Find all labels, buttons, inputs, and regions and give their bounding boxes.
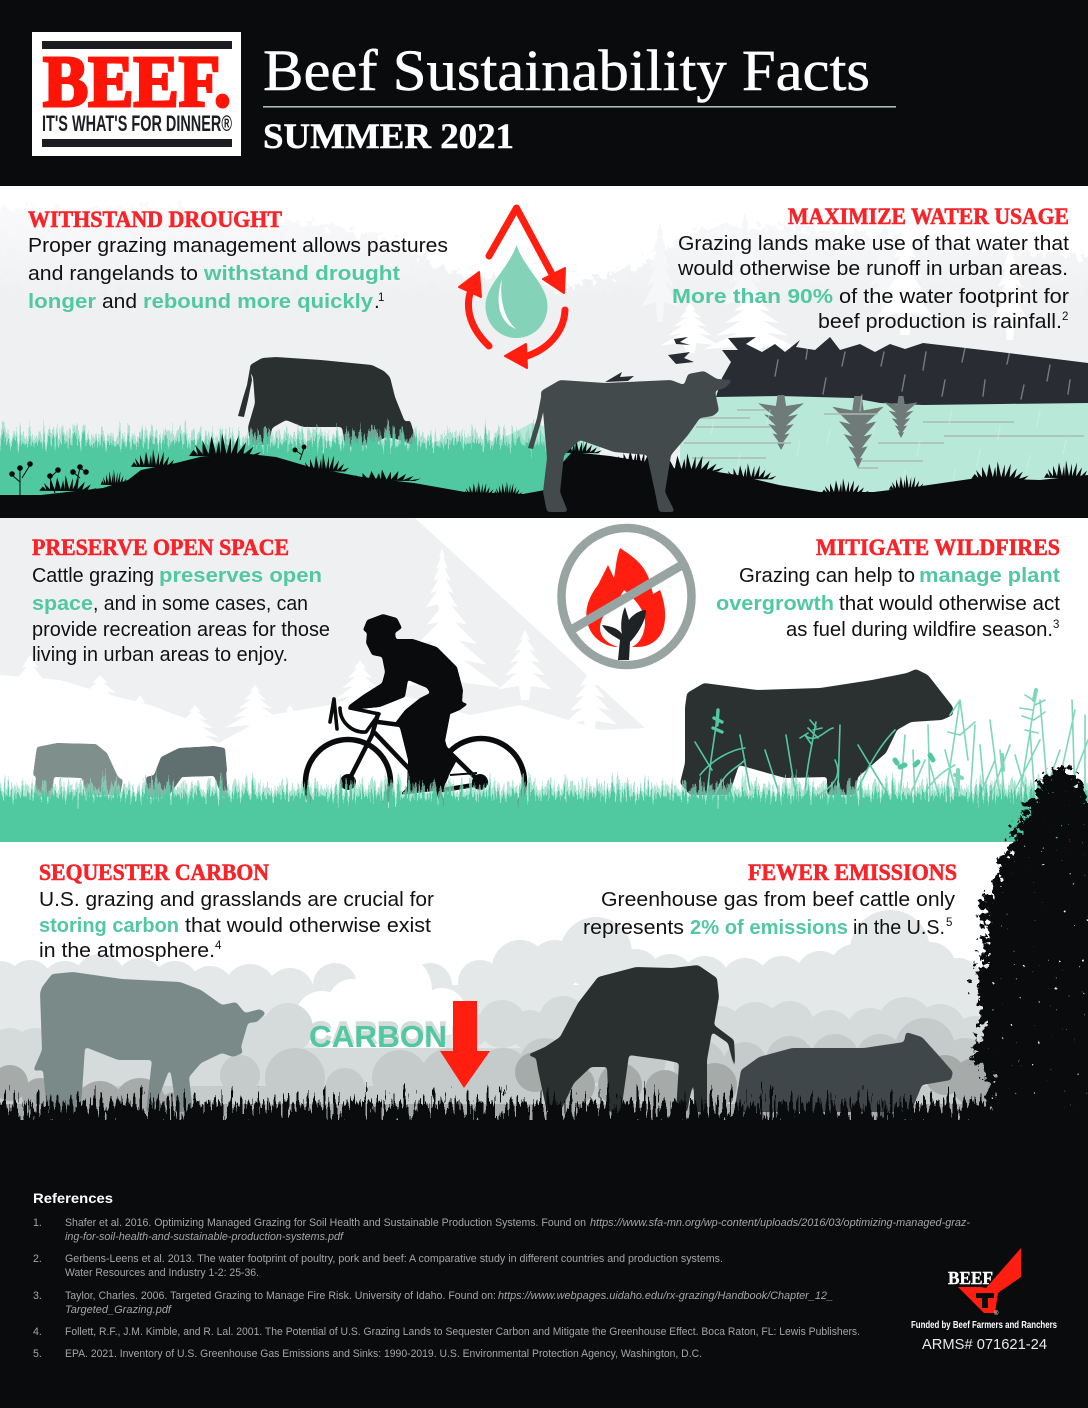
text block: , and in some cases, can: [93, 592, 308, 615]
text block: [716, 564, 1060, 641]
text block: of the water footprint for: [839, 285, 1069, 308]
light cloud layer: [0, 910, 1088, 1115]
reference 4: Follett, R.F., J.M. Kimble, and R. Lal. 2001. The Potential of U.S. Grazing Lands to Sequester Carbon and Mitigate the Greenhouse Effect. Boca Raton, FL: Lewis Publishers.: [65, 1326, 860, 1338]
panel: preserve open space: [32, 535, 330, 666]
ripples: [684, 410, 1084, 468]
tree: [970, 768, 1088, 1130]
lying calf: [734, 1032, 953, 1112]
reference 1: 1.: [33, 1217, 42, 1229]
text block: [32, 564, 330, 666]
text block: represents: [583, 916, 684, 939]
text block: and: [102, 290, 137, 313]
dark cloud layer: [0, 1052, 1088, 1130]
reference 2: 2.: [33, 1253, 42, 1265]
lake: [680, 392, 1088, 502]
reference 5: EPA. 2021. Inventory of U.S. Greenhouse Gas Emissions and Sinks: 1990-2019. U.S. Environmental Protection Agency, Washington, D.C.: [65, 1348, 702, 1360]
text block: that would otherwise exist: [185, 914, 431, 937]
text block: storing carbon: [39, 914, 179, 937]
text block: rebound more quickly: [143, 290, 374, 313]
header band: [0, 0, 1088, 186]
scene: open space and wildfire: [0, 518, 1088, 875]
logo: funded by beef checkoff: [911, 1248, 1057, 1353]
text block: Grazing can help to: [739, 564, 915, 587]
text block: 4: [215, 940, 222, 952]
text block: Cattle grazing: [32, 564, 154, 587]
dark forest: [716, 337, 1088, 405]
reference 3: 3.: [33, 1290, 42, 1302]
text block: 2: [1062, 311, 1068, 323]
green grass: [0, 418, 584, 495]
deep cloud layer: [0, 1018, 1088, 1120]
panel: withstand drought: [28, 207, 448, 313]
text block: would otherwise be runoff in urban areas.: [677, 257, 1068, 280]
scene: carbon and emissions: [0, 910, 1088, 1130]
text block: [672, 232, 1069, 333]
scene: drought and water: [0, 208, 1088, 524]
text block: Proper grazing management allows pastures: [28, 234, 448, 257]
reference 1: [33, 1217, 970, 1243]
text block: U.S. grazing and grasslands are crucial for: [39, 888, 434, 911]
title rule: [263, 106, 896, 108]
reference 3: https://www.webpages.uidaho.edu/rx-grazing/Handbook/Chapter_12_: [498, 1290, 833, 1302]
text block: .: [374, 290, 380, 313]
subtitle: SUMMER 2021: [263, 116, 514, 156]
text block: [28, 234, 448, 313]
mint hill: [500, 423, 600, 458]
heading: SEQUESTER CARBON: [39, 860, 269, 885]
logo: BEEF It's What's For Dinner: [32, 32, 241, 156]
lake reflections: [758, 395, 918, 468]
wildflowers: [10, 445, 306, 495]
floating branches: [605, 337, 694, 382]
text block: overgrowth: [716, 592, 834, 615]
heading: PRESERVE OPEN SPACE: [32, 535, 289, 560]
text block: [583, 888, 956, 939]
title: Beef Sustainability Facts: [263, 38, 870, 103]
reference 1: Shafer et al. 2016. Optimizing Managed Grazing for Soil Health and Sustainable Production Systems. Found on: [65, 1217, 586, 1229]
reference 3: Targeted_Grazing.pdf: [65, 1304, 172, 1316]
panel: mitigate wildfires: [716, 535, 1060, 641]
arrow: carbon downward: [440, 1001, 490, 1088]
text block: 3: [1053, 619, 1059, 631]
text block: Greenhouse gas from beef cattle only: [601, 888, 956, 911]
text block: 5: [946, 917, 952, 929]
icon: no wildfire: [562, 528, 692, 665]
reference 5: 5.: [33, 1348, 42, 1360]
teal grass band: [0, 768, 1088, 842]
logo: BEEF It's What's For Dinner: IT'S WHAT'S FOR DINNER®: [42, 111, 232, 136]
cyclist: [306, 614, 524, 826]
text block: manage plant: [919, 564, 1060, 587]
text block: in the U.S.: [853, 916, 945, 939]
references heading: References: [33, 1190, 113, 1206]
white cloud: [295, 953, 466, 1048]
label: carbon: CARBON: [309, 1019, 447, 1054]
mountain backdrop: [0, 518, 645, 755]
heading: FEWER EMISSIONS: [748, 860, 957, 885]
reference 3: [33, 1290, 833, 1316]
label: carbon: CARBON: [309, 1015, 447, 1050]
tall grasses: [895, 690, 1088, 800]
heading: WITHSTAND DROUGHT: [28, 207, 282, 232]
reference 2: Gerbens-Leens et al. 2013. The water footprint of poultry, pork and beef: A comparative study in different countries and production systems.: [65, 1253, 723, 1265]
reference 4: 4.: [33, 1326, 42, 1338]
panel: maximize water usage: [672, 204, 1069, 333]
text block: as fuel during wildfire season.: [786, 618, 1053, 641]
text block: and rangelands to: [28, 262, 198, 285]
text block: living in urban areas to enjoy.: [32, 643, 288, 666]
text block: in the atmosphere.: [39, 939, 215, 962]
heading: MAXIMIZE WATER USAGE: [788, 204, 1069, 229]
text block: 1: [378, 292, 384, 304]
panel: fewer emissions: [583, 860, 957, 939]
plants over cow: [695, 710, 895, 795]
logo: funded by beef checkoff: ®: [994, 1310, 999, 1317]
text block: [39, 888, 434, 962]
misty forest backdrop: [0, 214, 1088, 468]
reference 2: Water Resources and Industry 1-2: 25-36.: [65, 1267, 259, 1279]
logo: funded by beef checkoff: ARMS# 071621-24: [922, 1336, 1047, 1353]
text block: that would otherwise act: [839, 592, 1060, 615]
references: [33, 1190, 970, 1360]
text block: Grazing lands make use of that water that: [678, 232, 1069, 255]
cow grey left: [33, 972, 266, 1112]
small cow right: [146, 746, 232, 797]
rain: [711, 345, 1070, 484]
reference 1: ing-for-soil-health-and-sustainable-production-systems.pdf: [65, 1231, 344, 1243]
text block: space: [32, 592, 93, 615]
black grass and ground: [0, 1104, 1088, 1408]
logo: funded by beef checkoff: BEEF: [948, 1268, 993, 1288]
grazing dark cow: [527, 965, 736, 1112]
text block: More than 90%: [672, 285, 833, 308]
reference 2: [33, 1253, 723, 1279]
text block: 2% of emissions: [690, 916, 848, 939]
panel: sequester carbon: [39, 860, 434, 962]
grazing cow: [238, 357, 417, 447]
small cow left: [33, 743, 123, 797]
standing black cow: [680, 669, 953, 795]
text block: beef production is rainfall.: [818, 310, 1062, 333]
text block: withstand drought: [203, 262, 400, 285]
text block: provide recreation areas for those: [32, 618, 330, 641]
mid cloud layer: [0, 996, 1088, 1118]
heading: MITIGATE WILDFIRES: [816, 535, 1060, 560]
standing calf: [528, 371, 733, 512]
text block: longer: [28, 290, 96, 313]
reference 3: Taylor, Charles. 2006. Targeted Grazing to Manage Fire Risk. University of Idaho. Found on:: [65, 1290, 496, 1302]
text block: preserves open: [159, 564, 322, 587]
reference 1: https://www.sfa-mn.org/wp-content/uploads/2016/03/optimizing-managed-graz-: [590, 1217, 970, 1229]
logo: BEEF It's What's For Dinner: BEEF.: [43, 41, 231, 122]
black ground: [0, 433, 1088, 518]
icon: water drop with recycling arrows: [459, 208, 565, 368]
